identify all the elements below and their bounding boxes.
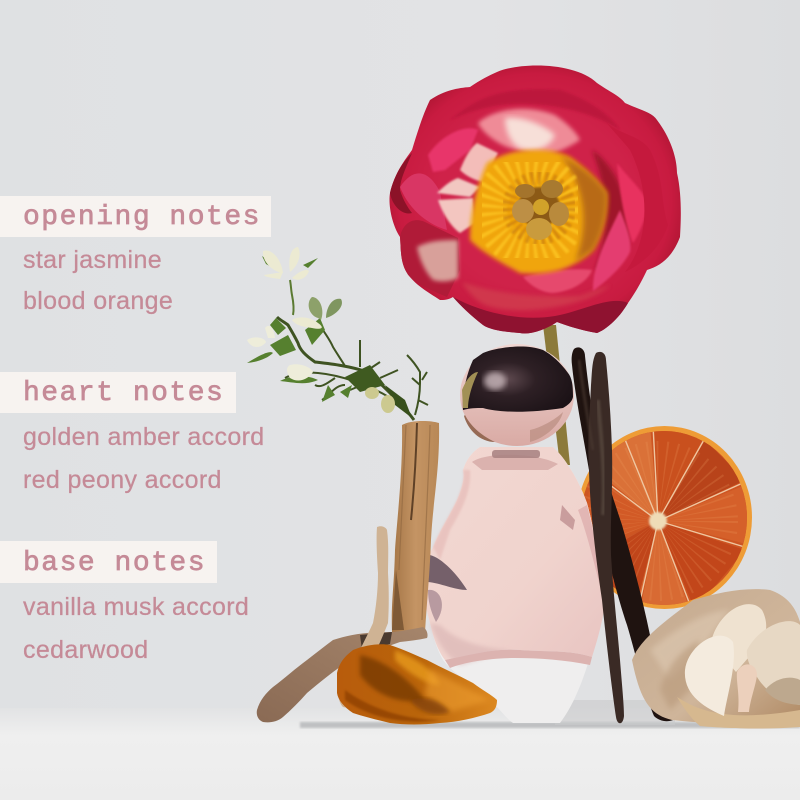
- neck: [472, 455, 558, 470]
- note: star jasmine: star jasmine: [23, 246, 162, 274]
- left glass edge: [433, 470, 470, 560]
- cap sphere: [460, 344, 574, 446]
- cap dark reflection: [463, 346, 573, 412]
- icon: smoky quartz rock: [632, 589, 800, 724]
- icon: amber stone: [337, 644, 497, 724]
- lower-left petal: [400, 220, 460, 297]
- right pink petals: [617, 163, 647, 243]
- upper pink petal folds: [450, 89, 620, 130]
- heading: opening notes: opening notes: [23, 202, 261, 233]
- orchid right petal: [747, 621, 800, 705]
- top flower petals: [263, 247, 309, 280]
- icon: root wood: [257, 526, 428, 722]
- orange shaded stamens right: [560, 155, 607, 262]
- right refraction: [560, 505, 575, 530]
- lower warm band: [462, 282, 610, 310]
- icon: vanilla pods: [572, 347, 677, 723]
- orchid top petal: [712, 604, 766, 672]
- yellow stamens mass: [470, 150, 607, 274]
- icon: red peony flower: [389, 66, 681, 333]
- heading band: heart notes: [0, 372, 236, 413]
- note: vanilla musk accord: vanilla musk accord: [23, 593, 249, 621]
- twig: [339, 526, 389, 708]
- mid flower petals: [292, 297, 342, 329]
- pale left petals: [460, 143, 498, 182]
- orchid lower base: [677, 697, 800, 729]
- heading: base notes: base notes: [23, 548, 206, 579]
- note: blood orange: blood orange: [23, 287, 173, 315]
- dark red throat right: [592, 150, 629, 270]
- note: golden amber accord: golden amber accord: [23, 423, 265, 451]
- liquid edge band: [445, 650, 592, 668]
- floor: [0, 708, 800, 800]
- glass plinth: [555, 700, 675, 725]
- dark bottom rim: [453, 297, 628, 333]
- pink liquid: [422, 447, 605, 660]
- dark left edge: [390, 153, 412, 213]
- icon: blood orange slice: [577, 425, 752, 610]
- lower-left flower petals: [247, 326, 313, 380]
- panel: opening notes: [0, 196, 271, 315]
- cap lower reflection: [464, 415, 495, 442]
- panel: heart notes: [0, 372, 265, 494]
- sprig stems: [277, 280, 428, 420]
- icon: jasmine sprig: [247, 247, 428, 420]
- icon: cinnamon stick: [392, 421, 439, 632]
- heading band: opening notes: [0, 196, 271, 237]
- peony stem: [543, 325, 570, 465]
- heading band: base notes: [0, 541, 217, 583]
- buds: [365, 387, 395, 413]
- contact shadow: [300, 722, 800, 728]
- leaves: [247, 256, 412, 418]
- orchid left petal: [685, 636, 734, 716]
- icon: perfume bottle: [422, 344, 605, 723]
- radial stamen texture: [490, 170, 570, 250]
- note: red peony accord: red peony accord: [23, 466, 222, 494]
- icon: white orchid: [677, 604, 800, 729]
- pale lower-left petal centre: [417, 240, 458, 281]
- bottom pink petal: [523, 269, 592, 293]
- pale top petal: [478, 109, 580, 157]
- heading: heart notes: heart notes: [23, 378, 224, 409]
- centre carpels: [512, 180, 569, 240]
- panel: base notes: [0, 541, 249, 664]
- note: cedarwood: cedarwood: [23, 636, 148, 664]
- bottle body: [422, 447, 605, 723]
- left dark refraction: [427, 555, 467, 590]
- orchid lip: [737, 664, 757, 712]
- left pink petal: [400, 173, 447, 230]
